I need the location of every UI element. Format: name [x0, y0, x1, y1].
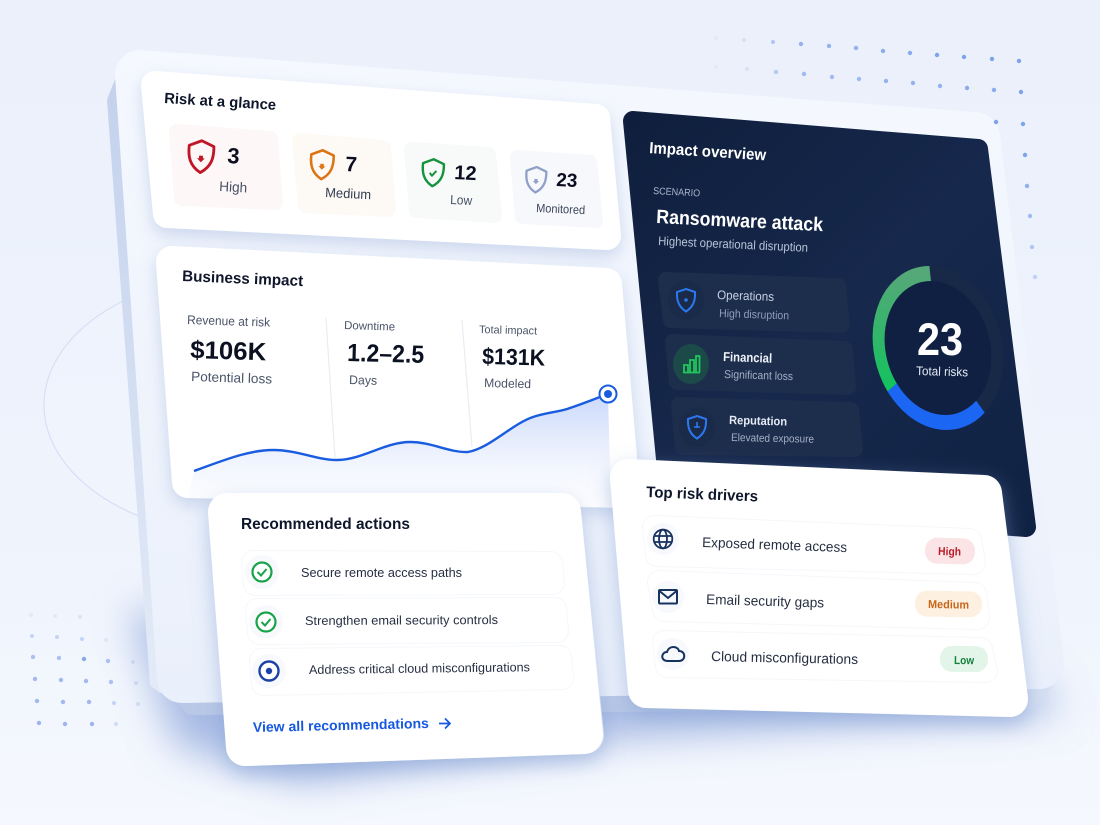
action row: strengthen email — [249, 605, 557, 639]
badge: low: Low — [954, 655, 974, 667]
icon: target — [252, 654, 286, 688]
metric: revenue at risk: $106K — [190, 336, 267, 366]
decorative arc — [44, 273, 456, 537]
badge: medium — [915, 590, 982, 618]
action row: strengthen email: Strengthen email security controls — [305, 613, 498, 628]
metric: revenue at risk: Potential loss — [191, 369, 273, 387]
driver row: email security gaps — [652, 581, 982, 618]
heading: business impact: Business impact — [182, 268, 303, 290]
metric: downtime: Downtime — [344, 320, 395, 334]
board shadow — [130, 610, 1060, 782]
card: monitored — [517, 157, 596, 221]
action row: secure remote access — [245, 555, 553, 589]
panel: top risk drivers — [628, 477, 1010, 699]
card: medium — [300, 141, 388, 209]
chart end marker — [600, 386, 616, 402]
metric: total impact: $131K — [482, 343, 546, 371]
driver row: cloud misconfigurations: Cloud misconfigurations — [711, 648, 858, 667]
icon: green shield — [422, 159, 444, 187]
icon: cloud — [657, 638, 689, 670]
row: financial: Significant loss — [724, 369, 793, 383]
badge: high: High — [938, 546, 961, 559]
donut chart: 23 — [917, 314, 963, 365]
heading: top risk drivers: Top risk drivers — [646, 484, 758, 505]
action row: secure remote access: Secure remote access paths — [301, 566, 462, 580]
heading: risk at a glance: Risk at a glance — [164, 90, 277, 114]
metric: total impact: Modeled — [484, 376, 531, 391]
donut chart: Total risks — [916, 364, 968, 379]
heading: impact overview: Impact overview — [649, 140, 767, 164]
icon: grey shield — [525, 166, 547, 193]
badge: high — [925, 537, 975, 565]
row: operations: Operations — [717, 288, 774, 304]
card: medium: Medium — [325, 185, 372, 202]
heading: ransomware attack: Ransomware attack — [656, 206, 824, 236]
card: medium: 7 — [345, 153, 358, 177]
card: monitored: Monitored — [536, 201, 585, 217]
driver row: cloud misconfigurations — [657, 638, 988, 672]
metric: total impact: Total impact — [479, 324, 537, 338]
icon: shield — [679, 407, 715, 447]
dot pattern: top right — [714, 36, 1037, 279]
icon: check circle — [249, 605, 283, 639]
panel: risk at a glance — [155, 85, 607, 236]
driver row: email security gaps: Email security gaps — [706, 591, 824, 610]
label: scenario: SCENARIO — [653, 186, 701, 199]
metric: revenue at risk: Revenue at risk — [187, 313, 271, 330]
card: low: 12 — [454, 162, 477, 185]
icon: orange shield — [310, 150, 334, 180]
metric: downtime: 1.2–2.5 — [347, 339, 425, 369]
card: high: 3 — [227, 143, 240, 169]
icon: red shield — [188, 140, 214, 173]
icon: globe — [647, 523, 679, 555]
dot: board corner — [994, 120, 998, 124]
row: reputation: Elevated exposure — [731, 432, 814, 446]
driver row: exposed remote access: Exposed remote access — [702, 534, 847, 555]
driver row: exposed remote access — [647, 523, 975, 565]
line chart — [188, 386, 616, 508]
dot pattern: bottom left — [29, 613, 140, 726]
metric: downtime: Days — [349, 373, 377, 388]
icon: check circle — [245, 555, 279, 589]
card: high: High — [219, 178, 248, 195]
subheading: Highest operational disruption — [658, 234, 808, 255]
heading: recommended actions: Recommended actions — [241, 516, 410, 533]
metric: total impact — [479, 324, 546, 391]
badge: medium: Medium — [928, 599, 969, 612]
panel: business impact — [172, 262, 624, 508]
row: financial — [673, 342, 848, 387]
panel: impact overview — [633, 121, 1026, 527]
row: reputation — [679, 405, 855, 449]
action row: address cloud: Address critical cloud misconfigurations — [309, 660, 530, 677]
arrow — [439, 718, 450, 728]
icon: shield — [668, 280, 704, 320]
card: low — [411, 149, 495, 216]
link: view all recommendations: View all recommendations — [253, 715, 429, 735]
row: operations — [666, 280, 842, 325]
row: operations: High disruption — [719, 308, 789, 322]
donut chart — [871, 274, 1005, 423]
icon: green bar chart — [673, 344, 709, 384]
metric: revenue at risk — [187, 313, 273, 387]
card: low: Low — [450, 192, 473, 208]
action row: address cloud — [252, 654, 562, 688]
icon: mail — [652, 581, 684, 613]
badge: low — [940, 646, 988, 672]
card: monitored: 23 — [556, 170, 578, 192]
row: financial: Financial — [723, 349, 772, 366]
metric: downtime — [344, 320, 425, 388]
row: reputation: Reputation — [729, 413, 787, 429]
panel: recommended actions — [227, 512, 585, 747]
card: high — [177, 132, 275, 202]
board: dashboard base — [110, 70, 1048, 710]
